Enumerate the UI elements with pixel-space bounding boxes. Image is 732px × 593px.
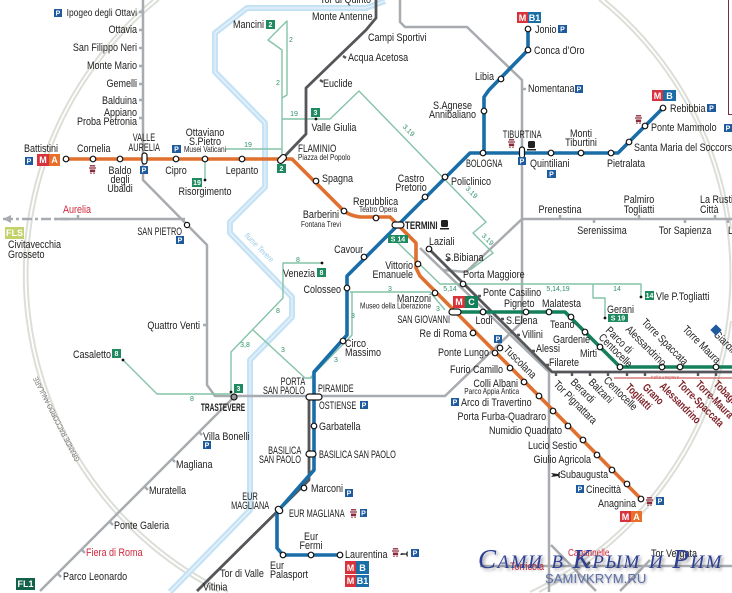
labels north-east: Ponte Mammolo <box>651 122 717 134</box>
labels north-east: Quintiliani <box>530 158 570 170</box>
rotated labels east: Torre Spaccata <box>639 317 690 368</box>
tram badges: 2 <box>269 22 273 29</box>
interchange stations <box>142 147 524 515</box>
labels centre: Campi Sportivi <box>368 32 427 44</box>
tram line numbers: 5,14,19 <box>546 286 570 293</box>
rotated red station labels <box>623 379 732 430</box>
labels north-east: S.Agnese <box>433 100 472 112</box>
tram line numbers: 3 <box>351 313 355 320</box>
labels north-east: Pietralata <box>607 158 645 170</box>
tram line numbers: 3 <box>334 357 338 364</box>
parking badges: P <box>362 402 367 410</box>
labels centre: Laurentina <box>345 549 388 561</box>
parking badges: P <box>560 26 565 34</box>
labels west: Quattro Venti <box>147 320 200 332</box>
labels west: VALLE <box>133 132 155 143</box>
rotated labels east <box>551 317 732 427</box>
stations line A <box>63 156 644 502</box>
labels east centre: Cinecittà <box>586 484 621 496</box>
labels centre: Venezia <box>283 268 315 280</box>
rotated labels east: Balzani <box>586 377 615 406</box>
plane icons <box>400 472 560 556</box>
logo MA Anagnina: A <box>633 512 640 522</box>
labels west: Casaletto <box>73 349 111 361</box>
labels east centre: Ponte Casilino <box>483 287 541 299</box>
line dark grey Roma-Viterbo and Roma-Lido <box>197 0 732 591</box>
labels centre: Fermi <box>299 540 323 552</box>
labels west: Proba Petronia <box>77 116 137 128</box>
logo MC San Giovanni: M <box>455 297 463 307</box>
labels centre: EUR MAGLIANA <box>289 508 345 519</box>
stations line C and Laziali <box>184 222 719 370</box>
tram badges: 19 <box>193 180 201 187</box>
rotated red station labels: Togliatti <box>623 382 654 413</box>
labels north-east: Policlinico <box>451 176 491 188</box>
labels west: Monte Mario <box>87 60 137 72</box>
labels north-east: TIBURTINA <box>503 129 542 140</box>
tram badges: 8 <box>320 270 324 277</box>
labels east centre: Vle P.Togliatti <box>656 291 709 303</box>
tram line numbers: 8 <box>296 257 300 264</box>
labels centre: Piazza del Popolo <box>298 152 350 162</box>
tram badges: S 19 <box>611 316 625 322</box>
labels west: Fiera di Roma <box>86 547 143 559</box>
river Tevere <box>170 1 385 592</box>
bus icons <box>89 115 653 557</box>
labels east centre: Filarete <box>549 357 579 369</box>
labels centre: Colosseo <box>304 284 341 296</box>
labels centre: OSTIENSE <box>319 400 356 411</box>
labels centre: Euclide <box>323 78 353 90</box>
labels east centre: Alessi <box>536 343 560 355</box>
labels east centre: Numidio Quadrato <box>489 425 562 437</box>
labels east centre: Parco Appia Antica <box>464 386 520 396</box>
labels east centre: Porta Maggiore <box>463 269 525 281</box>
labels east centre: Emanuele <box>373 269 413 281</box>
labels centre: Barberini <box>303 209 339 221</box>
labels west: Ipogeo degli Ottavi <box>67 6 137 18</box>
river label: fiume Tevere <box>242 231 276 264</box>
labels north-east: Libia <box>475 71 494 83</box>
tram badges: 3 <box>237 386 241 393</box>
parking badges: P <box>520 158 525 166</box>
parking badges: P <box>142 168 147 174</box>
labels centre: Eur <box>304 531 319 543</box>
labels north-east: Città <box>700 204 719 216</box>
labels north-east: Pretorio <box>395 182 427 194</box>
tram line numbers: 2 <box>289 37 293 44</box>
parking badges: P <box>453 400 458 406</box>
parking badges: P <box>56 10 61 18</box>
rotated red station labels: Alessandrino <box>657 381 703 427</box>
tram line numbers: 19 <box>244 142 252 149</box>
logo MB MB1 Laurentina: B <box>359 563 366 573</box>
rotated labels east: Parco di <box>603 325 635 357</box>
logo MA Anagnina: M <box>622 512 629 522</box>
parking badges: P <box>205 442 210 450</box>
rotated red station labels: Grano <box>640 382 666 408</box>
labels west: Aurelia <box>63 204 91 216</box>
labels west: San Filippo Neri <box>73 42 137 54</box>
labels east centre: Colli Albani <box>473 378 518 390</box>
logo MA Battistini: A <box>51 155 58 165</box>
labels west <box>8 6 264 593</box>
watermark title: Сами в Крым и Рим <box>478 544 723 574</box>
parking badges: P <box>549 172 554 178</box>
logo MB MB1 Laurentina: M <box>347 563 354 573</box>
labels west: Ubaldi <box>107 183 133 195</box>
labels east centre: Malatesta <box>542 298 581 310</box>
labels centre: TERMINI <box>405 220 438 232</box>
labels east centre: Laziali <box>429 236 455 248</box>
labels west: Cornelia <box>77 143 111 155</box>
parking badges: P <box>496 336 501 344</box>
parking badges: P <box>178 238 183 244</box>
labels centre: FLAMINIO <box>298 143 337 155</box>
parking badges: P <box>174 146 179 154</box>
labels west: Cipro <box>165 165 187 177</box>
labels west: Villa Bonelli <box>203 431 249 443</box>
tram line numbers: 3.19 <box>464 186 478 200</box>
labels centre: Mancini <box>233 19 264 31</box>
labels centre: PORTA <box>281 376 306 387</box>
labels north-east: Tor Sapienza <box>659 225 712 237</box>
labels centre: Cavour <box>334 244 364 256</box>
labels west: Musei Vaticani <box>184 144 226 154</box>
logo MB Rebibbia: B <box>666 91 673 101</box>
labels north-east <box>395 24 732 237</box>
tram line numbers: 14 <box>613 286 621 293</box>
tram line numbers: 3,8 <box>240 342 250 349</box>
logo MB1 Jonio: B1 <box>529 13 540 23</box>
labels west: degli <box>110 174 130 186</box>
labels west: S.Pietro <box>189 136 221 148</box>
labels west: TRASTEVERE <box>201 401 245 413</box>
rotated red station labels: Torre-Spaccata <box>675 379 726 430</box>
labels centre: Teatro Opera <box>359 204 398 214</box>
red suspended section <box>614 375 732 381</box>
logo MA Battistini <box>37 154 60 166</box>
line B blue <box>277 29 663 555</box>
labels north-east: Palmiro <box>624 194 655 206</box>
parking badges: P <box>658 498 663 506</box>
labels west: Ottaviano <box>186 127 225 139</box>
logo FLS: FLS <box>6 228 23 238</box>
labels east centre: Subaugusta <box>560 469 608 481</box>
labels west: Ponte Galeria <box>114 520 169 532</box>
stations line B <box>280 26 666 558</box>
labels east centre: Torricola <box>510 561 544 573</box>
labels centre: Spagna <box>322 173 353 185</box>
line A orange <box>66 159 641 499</box>
tram line numbers: 2 <box>276 80 280 87</box>
labels centre: Fontana Trevi <box>301 219 341 229</box>
logo MA Anagnina <box>620 511 642 522</box>
tram lines <box>123 21 641 403</box>
labels centre: Acqua Acetosa <box>348 52 408 64</box>
logo MB MB1 Laurentina <box>345 561 369 587</box>
labels east centre: Re di Roma <box>420 328 467 340</box>
labels east centre: Furio Camillo <box>450 364 503 376</box>
labels east centre: Gardenie <box>553 334 590 346</box>
parking badges: P <box>577 86 582 94</box>
labels east centre: Gerani <box>607 304 634 316</box>
parking badges: P <box>347 490 352 498</box>
parking badges: P <box>726 126 731 132</box>
tram line numbers: 3 <box>436 306 440 313</box>
ticks dark <box>320 56 716 565</box>
labels centre: EUR <box>242 491 258 502</box>
labels east centre: Teano <box>550 319 575 331</box>
labels west: Muratella <box>149 485 186 497</box>
labels centre: MAGLIANA <box>231 500 270 511</box>
parking badges: P <box>578 486 583 494</box>
logo FL1: FL1 <box>17 579 34 589</box>
tram line numbers: 8 <box>190 396 194 403</box>
labels west: Appiano <box>104 107 137 119</box>
line C green <box>455 312 732 367</box>
labels centre: BASILICA <box>268 445 302 456</box>
labels east centre: Villini <box>522 329 543 341</box>
labels east centre: Mirti <box>580 348 597 360</box>
red suspended section: tratta sospesa <box>651 375 679 381</box>
labels north-east: Annibaliano <box>429 109 476 121</box>
tram badges: 3 <box>314 110 318 117</box>
labels west: Lepanto <box>226 165 259 177</box>
labels east centre: Capannelle <box>568 547 609 558</box>
labels east centre: Vittorio <box>385 260 413 272</box>
labels east centre: Ponte Lungo <box>438 347 489 359</box>
logo MB MB1 Laurentina: M <box>347 576 354 586</box>
labels north-east: Castro <box>398 173 425 185</box>
labels west: SAN PIETRO <box>137 226 182 237</box>
labels north-east: Serenissima <box>577 225 627 237</box>
labels north-east: Tiburtini <box>565 137 597 149</box>
labels east centre: Lodi <box>475 315 493 327</box>
labels centre: Repubblica <box>353 196 398 208</box>
tram line numbers: 3.19 <box>480 233 494 247</box>
labels east centre: S.Bibiana <box>445 252 484 264</box>
maroon frame corner <box>728 0 732 114</box>
labels west: Baldo <box>109 165 132 177</box>
labels east centre <box>360 236 709 573</box>
labels west: Ottavia <box>109 24 137 36</box>
rotated labels east: Berardi <box>568 377 597 406</box>
labels east centre: Manzoni <box>397 293 431 305</box>
labels centre: SAN PAOLO <box>259 454 301 465</box>
tram badges: 2 <box>280 166 284 173</box>
parking badges: P <box>709 106 714 112</box>
tram line numbers: 3.19 <box>401 124 415 138</box>
tram badges: S 14 <box>391 236 405 244</box>
tram line numbers: 3 <box>388 286 392 293</box>
tram line numbers: 5,14 <box>443 286 457 293</box>
logo MB MB1 Laurentina: B1 <box>357 576 368 586</box>
labels centre: Circo <box>345 338 366 350</box>
tram line numbers <box>190 37 621 403</box>
labels east centre: S.Elena <box>506 315 538 327</box>
labels east centre: Giulio Agricola <box>533 454 591 466</box>
rotated labels east: Centocelle <box>601 375 640 414</box>
parking badges: P <box>413 550 418 558</box>
labels west: Balduina <box>102 95 137 107</box>
labels north-east: Monti <box>570 128 592 140</box>
labels centre: PIRAMIDE <box>318 383 354 394</box>
labels east centre: Tuscolana <box>501 344 539 382</box>
labels north-east: Togliatti <box>624 204 654 216</box>
labels centre: Massimo <box>345 347 381 359</box>
labels centre: Eur <box>270 560 285 572</box>
logo MB1 Jonio <box>517 12 541 23</box>
tram line numbers: 8 <box>276 308 280 315</box>
ring road label: GRANDE RACCORDO ANULARE <box>32 375 82 462</box>
logo MB Rebibbia <box>652 90 676 101</box>
labels centre <box>231 0 438 581</box>
tram badges: 8 <box>115 351 119 358</box>
logo MB Rebibbia: M <box>654 91 661 101</box>
labels centre: Garbatella <box>319 421 361 433</box>
logo MB1 Jonio: M <box>519 13 526 23</box>
watermark url: SAMIVKRYM.RU <box>545 571 646 586</box>
parking badges: P <box>27 158 32 166</box>
rotated labels east: Tor Pignattara <box>551 379 599 427</box>
labels west: Grosseto <box>8 249 45 261</box>
labels west: Risorgimento <box>179 186 232 198</box>
labels east centre: SAN GIOVANNI <box>397 314 450 325</box>
labels north-east: Prenestina <box>538 204 582 216</box>
labels centre: Monte Antenne <box>312 11 373 23</box>
labels east centre: Lucio Sestio <box>528 440 577 452</box>
tram line numbers: 3 <box>281 347 285 354</box>
labels west: Magliana <box>176 459 213 471</box>
labels west: Gemelli <box>106 78 137 90</box>
tram badges: 14 <box>646 293 653 300</box>
labels west: Civitavecchia <box>8 239 61 251</box>
rotated labels east: Centocelle <box>596 332 635 371</box>
labels north-east: Jonio <box>535 24 557 36</box>
labels east centre: Anagnina <box>598 498 636 510</box>
tram line numbers: 19 <box>290 111 298 118</box>
logo MA Battistini: M <box>39 155 47 165</box>
labels centre: Valle Giulia <box>312 122 357 134</box>
parking badges: P <box>361 510 366 518</box>
rotated labels east: Alessandrino <box>623 324 668 369</box>
labels north-east: Rebibbia <box>670 103 706 115</box>
rotated labels east: Torre Maura <box>680 324 723 367</box>
labels north-east: BOLOGNA <box>466 158 503 169</box>
labels west: AURELIA <box>128 142 161 153</box>
labels centre: Marconi <box>311 483 343 495</box>
labels east centre: Tor Vergata <box>651 548 697 560</box>
labels west: Parco Leonardo <box>63 571 127 583</box>
labels centre: SAN PAOLO <box>263 385 305 396</box>
labels east centre: Pigneto <box>504 298 535 310</box>
tram stops small <box>122 118 642 393</box>
labels west: Tor di Valle <box>220 568 264 580</box>
labels east centre: Museo della Liberazione <box>360 301 431 311</box>
labels east centre: Arco di Travertino <box>461 397 532 409</box>
labels west: Battistini <box>24 143 58 155</box>
labels north-east: Conca d’Oro <box>534 45 585 57</box>
tram badges <box>112 20 654 393</box>
logo MC San Giovanni: C <box>468 297 475 307</box>
train icons <box>440 141 536 230</box>
labels centre: BASILICA SAN PAOLO <box>319 449 396 460</box>
labels north-east: Nomentana <box>528 83 575 95</box>
labels centre: Palasport <box>270 569 308 581</box>
logo MC San Giovanni <box>453 296 478 308</box>
labels east centre: Porta Furba-Quadraro <box>457 411 546 423</box>
